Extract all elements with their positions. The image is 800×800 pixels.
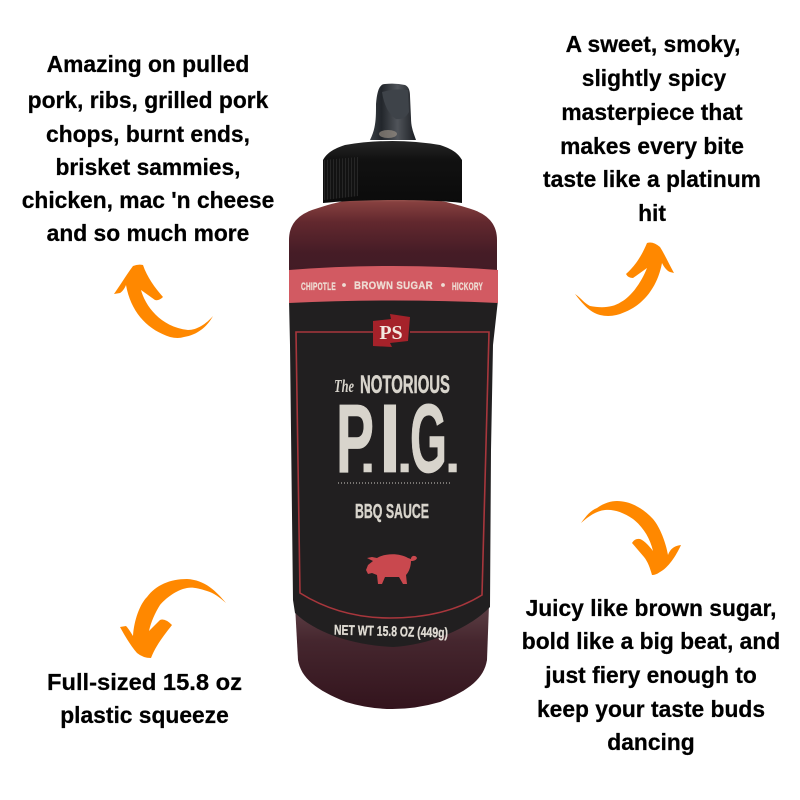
net weight: NET WT 15.8 OZ (449g)	[334, 622, 448, 640]
text: flavor description: masterpiece that	[561, 99, 743, 125]
text: taste description: bold like a big beat, and	[522, 628, 780, 654]
text: serving suggestions: chops, burnt ends,	[46, 121, 250, 147]
band text: HICKORY	[452, 281, 483, 293]
text: taste description: keep your taste buds	[537, 696, 765, 722]
label title: .	[397, 422, 412, 484]
arrow: top right	[575, 242, 674, 316]
text: flavor description: slightly spicy	[582, 65, 727, 91]
nozzle	[370, 84, 416, 140]
nozzle highlight	[379, 130, 397, 138]
label title: .	[445, 422, 460, 484]
text: taste description: dancing	[607, 729, 695, 755]
text: serving suggestions: and so much more	[47, 220, 249, 246]
label title: I	[379, 384, 401, 493]
label title: The	[334, 376, 354, 396]
label title	[334, 371, 460, 493]
text: taste description: just fiery enough to	[544, 662, 757, 688]
band text: BROWN SUGAR	[354, 280, 433, 292]
text: serving suggestions: pork, ribs, grilled pork	[28, 87, 269, 113]
PS badge	[373, 314, 410, 347]
cap	[323, 141, 462, 203]
text: serving suggestions: brisket sammies,	[55, 154, 241, 180]
black label	[289, 300, 498, 647]
arrow: bottom right	[581, 501, 681, 575]
text: flavor description: makes every bite	[560, 133, 744, 159]
band text: CHIPOTLE	[301, 281, 336, 293]
text: flavor description: taste like a platinum	[543, 166, 761, 192]
dotted rule	[338, 482, 451, 484]
arrow: top left	[114, 265, 213, 338]
text: serving suggestions	[22, 51, 274, 246]
text: flavor description: A sweet, smoky,	[566, 31, 740, 57]
band text	[301, 280, 483, 293]
bottle body	[289, 196, 497, 300]
label title: G	[410, 384, 447, 493]
nozzle opening	[382, 89, 409, 119]
text: flavor description: hit	[638, 200, 666, 226]
label title: NOTORIOUS	[360, 371, 450, 399]
cap ridges	[324, 157, 358, 200]
text: flavor description	[543, 31, 761, 226]
pink band	[289, 266, 498, 303]
label title: P	[336, 384, 374, 493]
red frame	[296, 332, 489, 618]
arrow: bottom left	[120, 579, 226, 658]
text: taste description: Juicy like brown sugar,	[526, 595, 776, 621]
text: bottle size	[47, 669, 242, 728]
text: bottle size: Full-sized 15.8 oz	[47, 669, 242, 695]
text: serving suggestions: Amazing on pulled	[47, 51, 249, 77]
bottle	[289, 84, 498, 709]
PS badge: PS	[379, 322, 403, 344]
label title: .	[360, 422, 375, 484]
text: bottle size: plastic squeeze	[60, 702, 229, 728]
text: serving suggestions: chicken, mac 'n cheese	[22, 187, 274, 213]
text: taste description	[522, 595, 780, 755]
bottle base	[295, 605, 489, 709]
BBQ SAUCE: BBQ SAUCE	[355, 501, 429, 523]
icon: pig	[366, 554, 417, 584]
